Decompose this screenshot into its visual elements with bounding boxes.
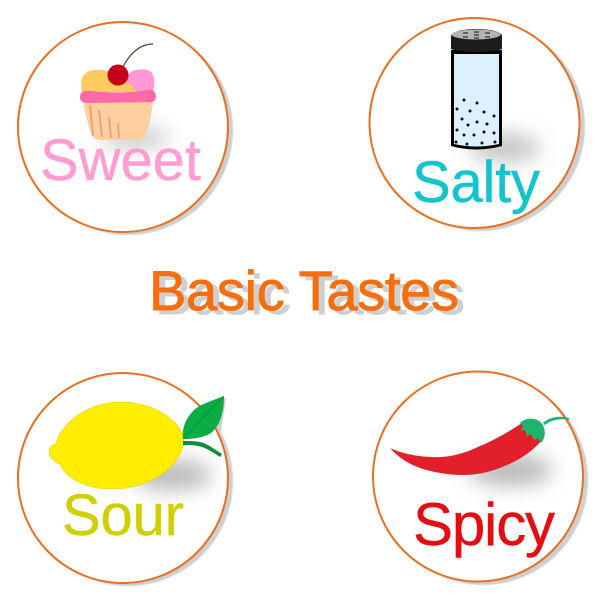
label: Sour: Sour	[62, 483, 184, 548]
icon: chili pepper	[390, 417, 569, 486]
label: Salty: Salty	[412, 150, 540, 215]
title: Basic Tastes: Basic Tastes	[149, 259, 459, 322]
icon: cupcake	[80, 44, 169, 151]
panel: salty	[370, 18, 585, 231]
leaf and stem	[183, 441, 222, 457]
lemon pores	[69, 457, 163, 474]
icon: salt shaker	[451, 29, 541, 162]
panel: spicy	[373, 372, 588, 585]
icon: lemon	[49, 396, 224, 490]
panel: sour	[18, 373, 233, 586]
title: Basic Tastes: Basic Tastes	[155, 263, 465, 326]
label: Sweet: Sweet	[40, 128, 201, 193]
label: Spicy: Spicy	[413, 491, 555, 558]
panel: sweet	[18, 22, 233, 235]
salt grains	[454, 98, 496, 146]
